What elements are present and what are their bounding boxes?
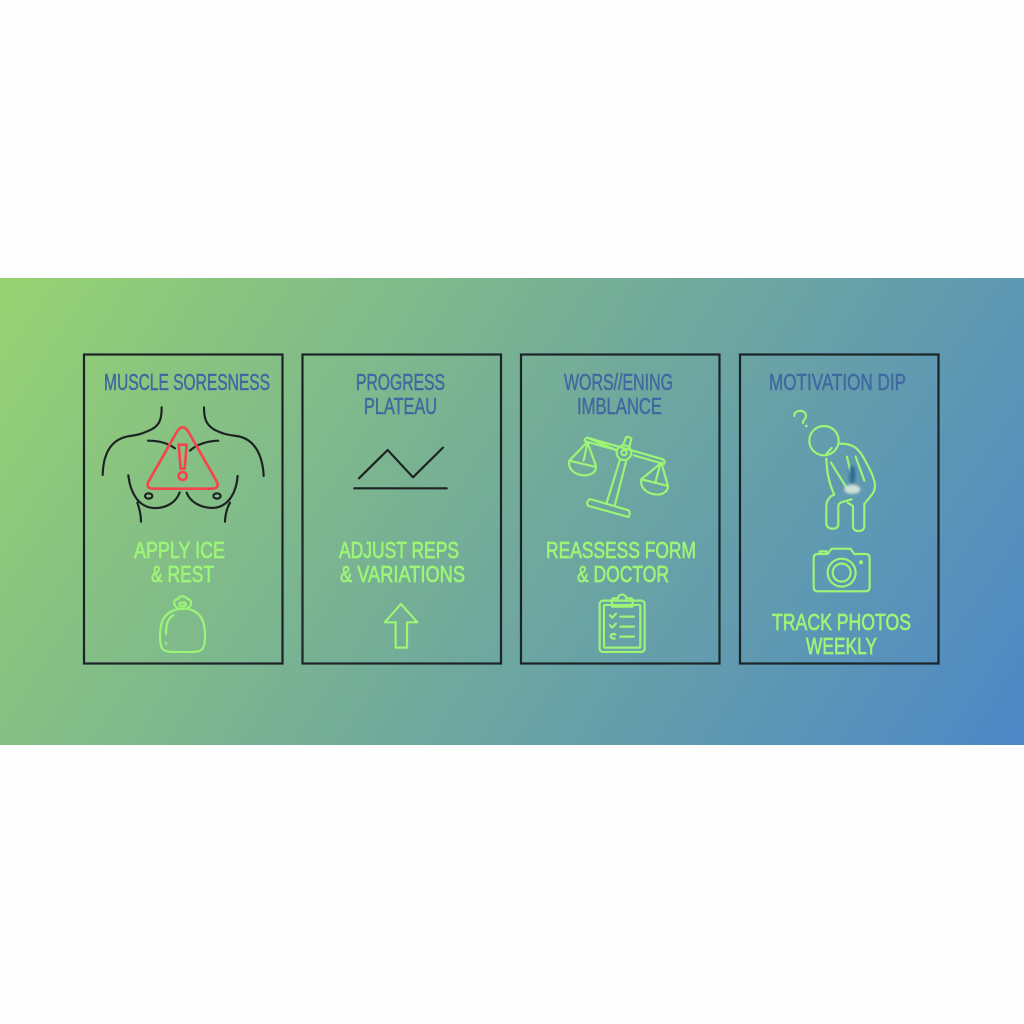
panel: muscle soreness bbox=[84, 354, 282, 664]
heading: worsening imbalance: WORS//ENING bbox=[564, 369, 673, 395]
solution text: apply ice and rest: APPLY ICE bbox=[134, 537, 225, 563]
heading: muscle soreness: MUSCLE SORESNESS bbox=[104, 369, 270, 395]
heading: progress plateau bbox=[356, 369, 445, 419]
icon: up arrow bbox=[385, 604, 417, 648]
solution text: track photos weekly bbox=[772, 609, 911, 659]
icon: slumped figure with question mark bbox=[794, 411, 875, 531]
solution text: reassess form and doctor bbox=[546, 537, 696, 587]
solution text: track photos weekly: WEEKLY bbox=[806, 633, 877, 659]
solution text: adjust reps and variations: & VARIATIONS bbox=[340, 561, 465, 587]
icon: flat line chart bbox=[354, 448, 447, 488]
gradient band bbox=[0, 278, 1024, 745]
heading: worsening imbalance: IMBLANCE bbox=[577, 393, 662, 419]
solution text: reassess form and doctor: & DOCTOR bbox=[577, 561, 669, 587]
icon: ice bag bbox=[160, 596, 205, 652]
panel: worsening imbalance bbox=[521, 354, 720, 664]
solution text: track photos weekly: TRACK PHOTOS bbox=[772, 609, 911, 635]
solution text: adjust reps and variations: ADJUST REPS bbox=[339, 537, 459, 563]
panel: motivation dip bbox=[740, 354, 938, 664]
solution text: apply ice and rest: & REST bbox=[151, 561, 214, 587]
solution text: adjust reps and variations bbox=[339, 537, 465, 587]
heading: motivation dip: MOTIVATION DIP bbox=[769, 369, 906, 395]
heading: progress plateau: PROGRESS bbox=[356, 369, 445, 395]
panel: progress plateau bbox=[302, 354, 501, 664]
icon: tilted scales bbox=[569, 437, 668, 517]
heading: progress plateau: PLATEAU bbox=[364, 393, 437, 419]
solution text: reassess form and doctor: REASSESS FORM bbox=[546, 537, 696, 563]
icon: clipboard checklist bbox=[600, 595, 645, 652]
icon: camera bbox=[814, 549, 870, 591]
solution text: apply ice and rest bbox=[134, 537, 225, 587]
heading: worsening imbalance bbox=[564, 369, 673, 419]
icon: torso with warning triangle bbox=[103, 407, 264, 522]
